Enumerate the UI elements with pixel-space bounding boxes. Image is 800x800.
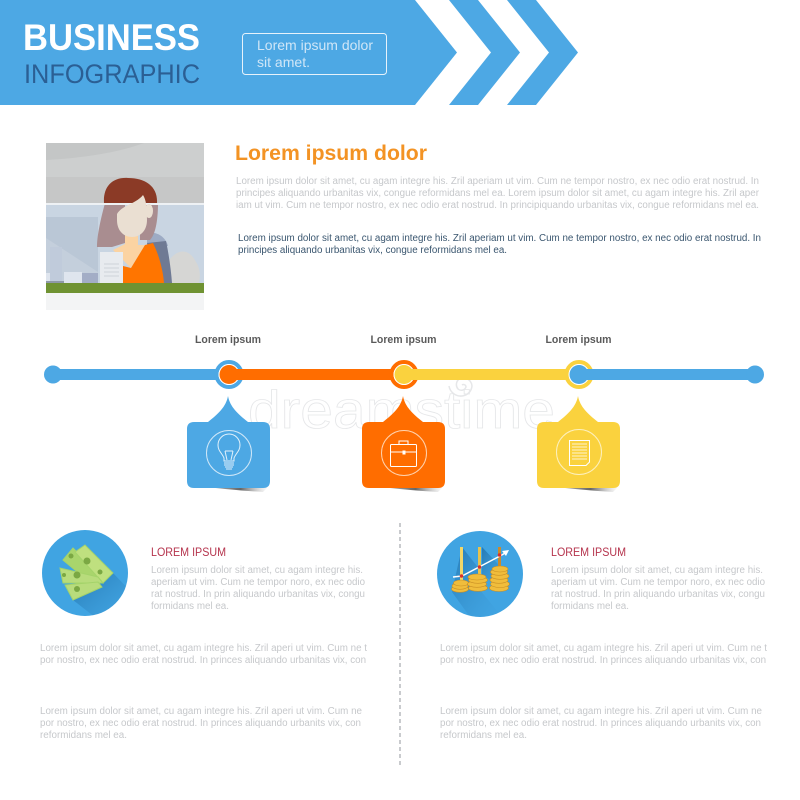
right text block 1: rat nostrud. In prin aliquando urbanitas vix, congu (551, 589, 765, 600)
banknotes (60, 545, 113, 600)
left text block 1 (151, 565, 365, 612)
right text block 2 (440, 643, 767, 666)
left icon: money (42, 530, 128, 616)
left text block 1: rat nostrud. In prin aliquando urbanitas vix, congu (151, 589, 365, 600)
callout: lightbulb (187, 396, 270, 492)
left text block 1: formidans mel ea. (151, 601, 229, 612)
coin stacks (452, 566, 510, 592)
timeline labels: Lorem ipsum (195, 334, 261, 346)
left text heading: LOREM IPSUM (151, 545, 226, 559)
end node (746, 366, 764, 384)
left text block 2: Lorem ipsum dolor sit amet, cu agam integre his. Zril aperi ut vim. Cum ne t (40, 643, 367, 654)
left text block 2: por nostro, ex nec odio erat nostrud. In princes aliquando urbanitas vix, con (40, 655, 366, 666)
left text block 2 (40, 643, 367, 666)
intro paragraph dark (238, 233, 761, 256)
intro paragraph grey: Lorem ipsum dolor sit amet, cu agam integre his. Zril aperiam ut vim. Cum ne tempor nostro, ex nec odio erat nostrud. In (236, 176, 759, 187)
right text heading: LOREM IPSUM (551, 545, 626, 559)
left text block 3: por nostro, ex nec odio erat nostrud. In princes aliquando urbanits vix, con (40, 718, 361, 729)
right text block 1 (551, 565, 765, 612)
node 1 (216, 362, 242, 387)
timeline labels (195, 334, 612, 346)
icon: document (570, 440, 590, 466)
right icon: coins chart (437, 531, 523, 618)
right text block 1: Lorem ipsum dolor sit amet, cu agam integre his. (551, 565, 763, 576)
right text block 3: Lorem ipsum dolor sit amet, cu agam integre his. Zril aperi ut vim. Cum ne (440, 706, 762, 717)
intro paragraph grey (236, 176, 760, 211)
left text block 1: aperiam ut vim. Cum ne tempor noro, ex nec odio (151, 577, 365, 588)
title: BUSINESS (23, 17, 200, 58)
right text block 3: por nostro, ex nec odio erat nostrud. In princes aliquando urbanits vix, con (440, 718, 761, 729)
icon: briefcase (390, 441, 416, 466)
right text block 2: Lorem ipsum dolor sit amet, cu agam integre his. Zril aperi ut vim. Cum ne t (440, 643, 767, 654)
right text block 1: formidans mel ea. (551, 601, 629, 612)
icon: lightbulb (218, 434, 240, 469)
right text block 3 (440, 706, 762, 741)
title (23, 17, 200, 89)
subtitle box (242, 34, 386, 74)
left text block 3: Lorem ipsum dolor sit amet, cu agam integre his. Zril aperi ut vim. Cum ne (40, 706, 362, 717)
timeline (44, 334, 764, 387)
title: INFOGRAPHIC (24, 59, 200, 89)
node 3 (566, 362, 592, 387)
right text block 3: reformidans mel ea. (440, 730, 527, 741)
callout: document (537, 396, 620, 492)
trend arrow (453, 550, 509, 578)
chevron 1 (449, 0, 520, 105)
left text block 3 (40, 706, 362, 741)
left text block 3: reformidans mel ea. (40, 730, 127, 741)
callout: briefcase (362, 396, 445, 492)
photo: woman at desk (46, 143, 204, 310)
watermark: dreamstime (248, 381, 555, 440)
subtitle box: sit amet. (257, 54, 310, 70)
right text block 1: aperiam ut vim. Cum ne tempor noro, ex nec odio (551, 577, 765, 588)
node 2 (392, 362, 416, 387)
start node (44, 366, 62, 384)
left text block 1: Lorem ipsum dolor sit amet, cu agam integre his. (151, 565, 363, 576)
timeline labels: Lorem ipsum (546, 334, 612, 346)
intro paragraph grey: iam ut vim. Cum ne tempor nostro, ex nec odio erat nostrud. In principiquando urbanitas vix, congue reformidans mel ea. (236, 200, 759, 211)
poles (460, 547, 501, 581)
section heading: Lorem ipsum dolor (235, 142, 427, 165)
timeline labels: Lorem ipsum (370, 334, 437, 346)
intro paragraph dark: principes aliquando urbanitas vix, congue reformidans mel ea. (238, 245, 507, 256)
intro paragraph dark: Lorem ipsum dolor sit amet, cu agam integre his. Zril aperiam ut vim. Cum ne tempor nostro, ex nec odio erat nostrud. In (238, 233, 761, 244)
intro paragraph grey: principes aliquando urbanitas vix, congue reformidans mel ea. Lorem ipsum dolor sit amet, cu agam integre his. Zril aper (236, 188, 760, 199)
right text block 2: por nostro, ex nec odio erat nostrud. In princes aliquando urbanitas vix, con (440, 655, 766, 666)
header banner (0, 0, 578, 105)
subtitle box: Lorem ipsum dolor (257, 37, 373, 53)
chevron 2 (507, 0, 578, 105)
divider (399, 523, 401, 765)
